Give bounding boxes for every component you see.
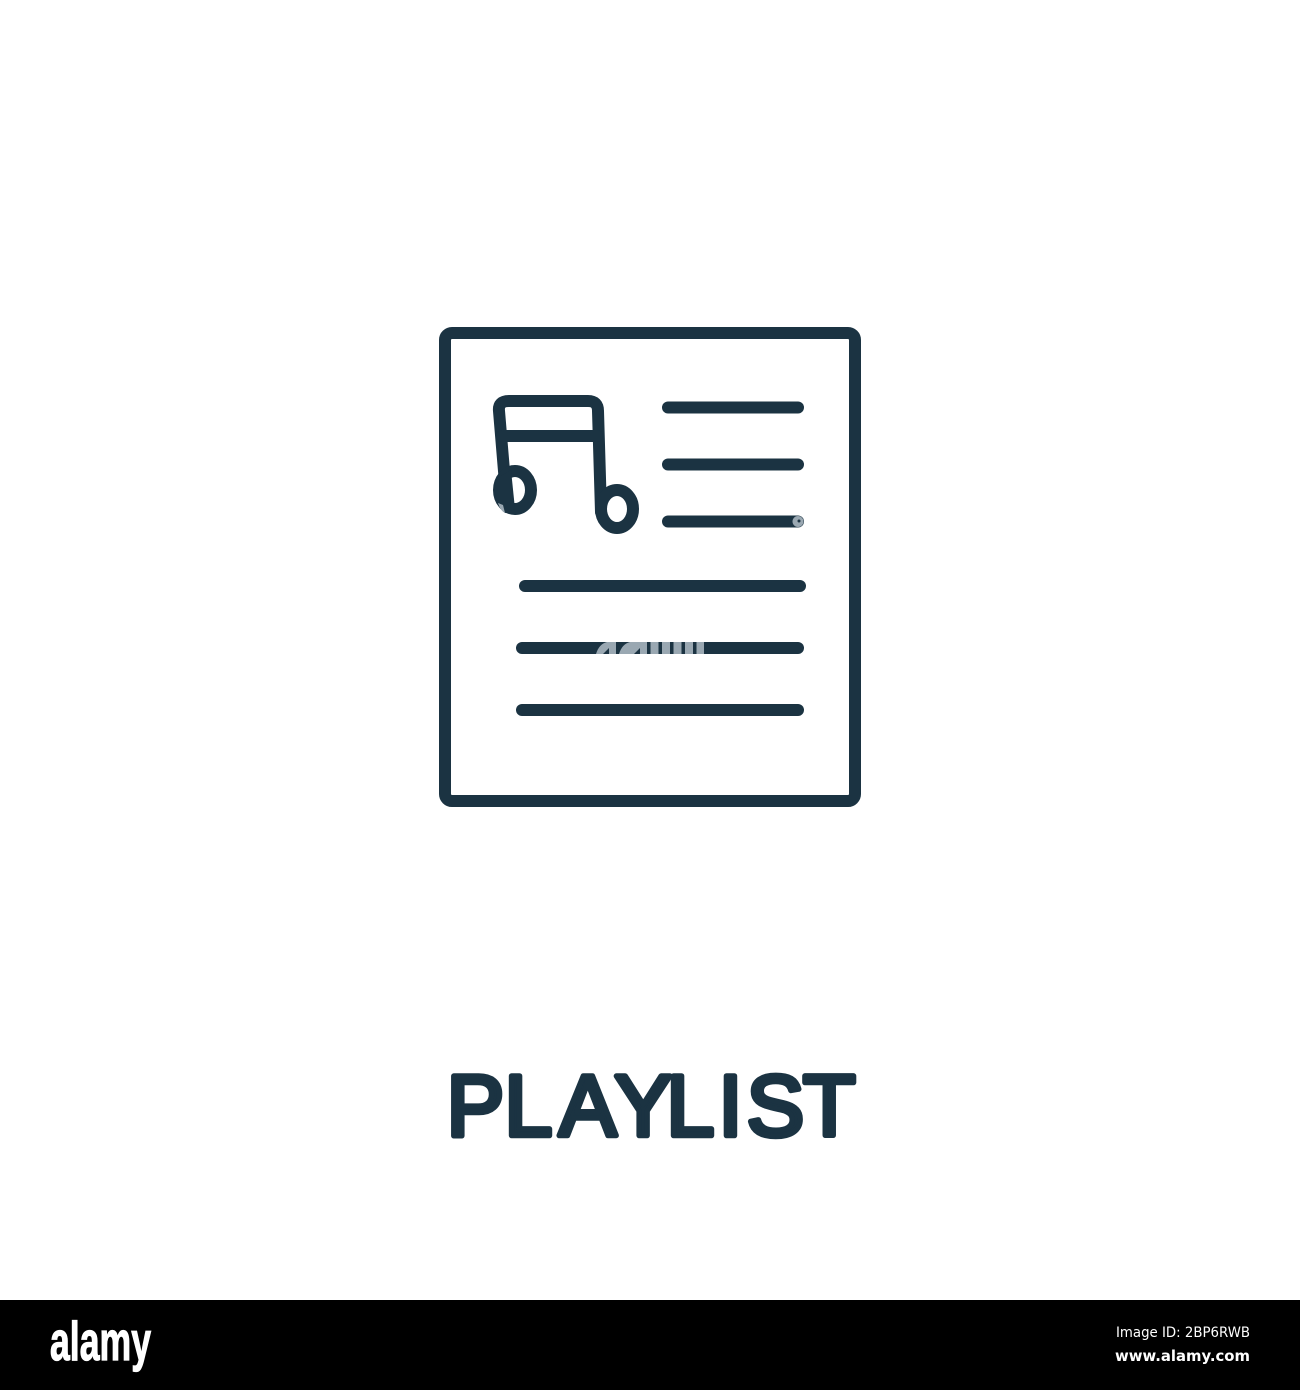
footer bar: [0, 1300, 1300, 1390]
website: www.alamy.com: [1115, 1347, 1250, 1365]
icon: short text lines: [668, 408, 798, 522]
title: PLAYLIST: [447, 1058, 856, 1154]
image id: Image ID: 2BP6RWB: [1116, 1325, 1250, 1341]
watermark dot: [792, 516, 804, 527]
icon: music note: [495, 401, 633, 528]
watermark remnant on line: [596, 642, 704, 654]
icon: long text lines: [522, 586, 800, 710]
logo: alamy: alamy: [50, 1310, 151, 1372]
icon: page frame: [445, 333, 855, 801]
icon: playlist document: [445, 333, 855, 801]
